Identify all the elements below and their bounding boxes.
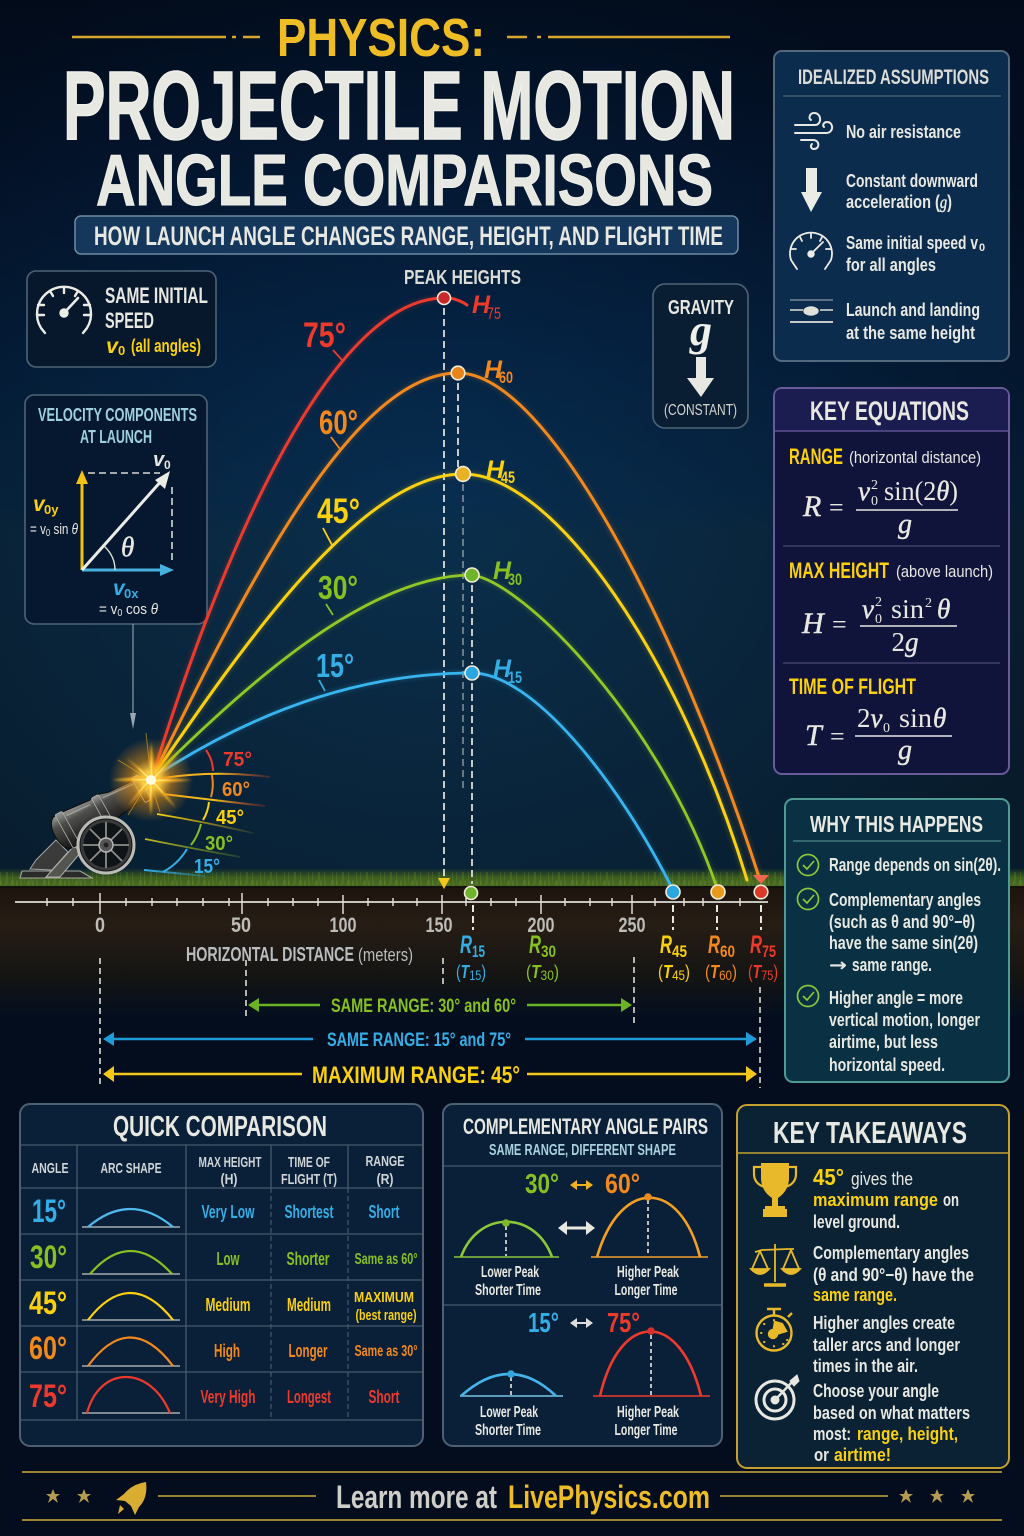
horizontal axis: 250 (618, 914, 646, 937)
panel: same initial speed: SAME INITIAL (105, 283, 208, 308)
row: 60 degrees: 60° (29, 1330, 67, 1366)
equation: time of flight: 0 (883, 721, 890, 736)
panel: key takeaways: Higher angles create (813, 1313, 955, 1333)
range labels: 45 (672, 967, 685, 983)
equation: range: 0 (871, 494, 878, 509)
panel: key takeaways: level ground. (813, 1212, 900, 1232)
panel: idealized assumptions: 0 (979, 242, 985, 254)
panel: idealized assumptions: for all angles (846, 255, 936, 275)
row: 75 degrees: 75° (29, 1378, 67, 1414)
range labels: (T (526, 962, 542, 982)
panel: idealized assumptions: at the same height (846, 323, 975, 343)
panel: idealized assumptions: acceleration (g) (846, 192, 952, 212)
range labels: 15 (472, 942, 485, 961)
panel: complementary angle pairs: SAME RANGE, DIFFERENT SHAPE (489, 1142, 676, 1159)
velocity vector diagram: v (33, 493, 46, 516)
velocity vector diagram: v (113, 577, 126, 600)
velocity vector diagram (30, 449, 174, 619)
arrow: maximum range 45 (103, 1062, 757, 1089)
horizontal axis: 50 (231, 914, 251, 937)
range labels: R (750, 931, 762, 959)
range labels: 75 (762, 942, 776, 961)
callout: gravity: g (689, 306, 712, 355)
icon: wind (795, 113, 832, 149)
range labels: (T (658, 962, 674, 982)
pair: 30 and 60: 30° (525, 1168, 559, 1199)
pair: 30 and 60: Higher Peak (617, 1264, 679, 1281)
panel: why this happens: airtime, but less (829, 1032, 938, 1052)
peak labels: H (493, 557, 512, 585)
panel: quick comparison: QUICK COMPARISON (113, 1111, 327, 1143)
pair: 30 and 60: Lower Peak (481, 1264, 539, 1281)
row: 75 degrees: Short (368, 1387, 400, 1407)
panel: why this happens (785, 799, 1009, 1082)
row: 15 degrees: 15° (32, 1193, 66, 1229)
horizontal axis: 150 (426, 914, 452, 937)
row: 60 degrees: Same as 30° (354, 1343, 418, 1360)
arrow: same range 30 and 60: SAME RANGE: 30° and 60° (331, 996, 516, 1017)
arc: 60 degrees (152, 373, 760, 880)
icon: target (756, 1375, 799, 1419)
arc glow (152, 298, 760, 888)
range labels: 15 (469, 967, 481, 983)
equation: max height: H (801, 607, 826, 640)
equation: max height: MAX HEIGHT (789, 558, 889, 583)
row: 45 degrees: Medium (206, 1295, 250, 1315)
velocity vector diagram: 0y (44, 502, 59, 517)
pair: 30 and 60: Shorter Time (475, 1282, 541, 1299)
row: 45 degrees: MAXIMUM (354, 1289, 414, 1306)
range labels: R (660, 931, 672, 959)
peak labels: 60 (499, 368, 513, 387)
peak markers (438, 292, 479, 680)
range labels: 60 (720, 942, 735, 961)
range labels: ) (773, 962, 778, 982)
panel: key takeaways: most: (813, 1424, 851, 1444)
horizontal axis: 100 (330, 914, 356, 937)
panel: key equations (774, 388, 1009, 774)
panel: why this happens: same range. (852, 955, 932, 975)
arrow: same range 15 and 75: SAME RANGE: 15° and 75° (327, 1030, 511, 1051)
table header: (H) (220, 1171, 238, 1188)
pair: 15 and 75: 15° (528, 1307, 559, 1338)
range labels: 30 (541, 967, 554, 983)
peak labels: 75 (487, 304, 501, 323)
velocity vector diagram: cos (122, 601, 151, 618)
subtitle banner (75, 216, 738, 254)
range labels (456, 931, 778, 983)
callout: gravity: (CONSTANT) (664, 402, 737, 419)
equation: time of flight (789, 674, 952, 766)
equation: range: 2 (871, 478, 878, 493)
equation: time of flight: g (898, 735, 912, 766)
angle labels on arcs: 30° (318, 569, 358, 606)
horizontal axis: (meters) (358, 945, 413, 965)
equation: max height: (above launch) (896, 562, 993, 581)
velocity vector diagram: θ (72, 521, 78, 538)
table header: ANGLE (32, 1160, 68, 1177)
footer (22, 1472, 1002, 1520)
illustration: cannon (20, 770, 154, 878)
range labels: R (529, 931, 541, 959)
pair: 30 and 60: 60° (605, 1168, 640, 1199)
equation: time of flight: sin (899, 703, 933, 733)
panel: key takeaways: on (943, 1190, 959, 1210)
subtitle banner: HOW LAUNCH ANGLE CHANGES RANGE, HEIGHT, AND FLIGHT TIME (94, 221, 723, 251)
velocity vector diagram: 0 (164, 458, 171, 472)
arrow: same range 30 and 60 (248, 996, 632, 1017)
arc: 15 degrees (152, 673, 672, 888)
velocity vector diagram: 0 (46, 528, 51, 539)
panel: key takeaways (737, 1105, 1009, 1468)
velocity vector diagram: 0 (117, 608, 123, 619)
panel: key takeaways: maximum range (813, 1190, 938, 1210)
horizontal axis: 200 (528, 914, 554, 937)
equation: max height: θ (937, 594, 950, 624)
row: 15 degrees: Short (368, 1202, 400, 1222)
icon: scales (751, 1244, 800, 1285)
row: 45 degrees (29, 1285, 416, 1324)
velocity vector diagram: sin (50, 521, 72, 538)
peak labels: H (486, 456, 505, 484)
equation: range: R (802, 490, 821, 523)
velocity vector diagram: θ (151, 601, 158, 618)
panel: idealized assumptions (774, 51, 1009, 361)
callout: gravity (653, 284, 748, 428)
panel: key takeaways: 45° (813, 1164, 844, 1190)
icon: down arrow (801, 168, 822, 212)
panel: key takeaways: Choose your angle (813, 1381, 939, 1401)
panel: same initial speed: SPEED (105, 308, 154, 333)
equation: max height: sin (891, 594, 925, 624)
row: 45 degrees: (best range) (356, 1307, 416, 1324)
launch angle guide (144, 749, 270, 878)
range labels: ) (554, 962, 559, 982)
angle labels on arcs: 60° (319, 404, 358, 442)
check marks (798, 854, 818, 1006)
equation: range: = (829, 493, 844, 522)
panel: complementary angle pairs (443, 1104, 722, 1446)
footer: LivePhysics.com (508, 1479, 710, 1515)
panel: idealized assumptions: No air resistance (846, 122, 961, 142)
table header: MAX HEIGHT (198, 1154, 262, 1171)
row: 75 degrees (29, 1377, 400, 1414)
equation: range: (horizontal distance) (849, 448, 981, 467)
main title line 2: ANGLE COMPARISONS (96, 141, 713, 221)
equation: range: v (858, 476, 870, 506)
panel: same initial speed: v (106, 335, 119, 358)
row: 30 degrees: 30° (30, 1239, 67, 1275)
panel: why this happens: Higher angle = more (829, 988, 963, 1008)
panel: key takeaways: same range. (813, 1285, 897, 1305)
velocity vector diagram: v (153, 449, 166, 471)
title block (63, 8, 738, 254)
row: 30 degrees: Same as 60° (354, 1251, 418, 1268)
pair: 15 and 75: Lower Peak (480, 1404, 538, 1421)
carriage (20, 840, 92, 878)
equation: time of flight: = (830, 722, 845, 751)
equation: range: sin(2θ) (884, 476, 958, 506)
panel: why this happens: → (829, 955, 847, 976)
horizontal axis: 0 (95, 914, 105, 937)
panel: velocity components: VELOCITY COMPONENTS (38, 405, 197, 425)
panel: why this happens: vertical motion, longer (829, 1010, 980, 1030)
footer: Learn more at (336, 1479, 497, 1515)
panel: same initial speed: (all angles) (131, 336, 201, 356)
equation: max height: v (862, 594, 874, 624)
peak labels: PEAK HEIGHTS (404, 267, 521, 289)
icons: stars (46, 1489, 975, 1503)
range labels: 60 (719, 967, 732, 983)
panel: key takeaways: (θ and 90°−θ) have the (813, 1265, 974, 1285)
row: 60 degrees: High (214, 1341, 240, 1361)
arc: 45 degrees (152, 474, 747, 880)
panel: quick comparison (20, 1104, 423, 1446)
range labels: R (708, 931, 720, 959)
pair: 15 and 75 (460, 1307, 710, 1439)
pair: 15 and 75: Higher Peak (617, 1404, 679, 1421)
callout: gravity: GRAVITY (668, 297, 734, 319)
row: 15 degrees (32, 1193, 400, 1229)
range labels: (T (456, 962, 472, 982)
panel: why this happens: horizontal speed. (829, 1055, 945, 1075)
equation: max height: 0 (875, 612, 882, 627)
range labels: ) (481, 962, 486, 982)
panel: complementary angle pairs: COMPLEMENTARY ANGLE PAIRS (463, 1114, 708, 1139)
panel: idealized assumptions: Same initial speed v (846, 233, 978, 253)
row: 15 degrees: Shortest (284, 1202, 334, 1222)
row: 15 degrees: Very Low (202, 1202, 255, 1222)
panel: idealized assumptions: Constant downward (846, 171, 978, 191)
launch angle guide: 45° (216, 807, 244, 829)
equation: time of flight: T (805, 719, 824, 752)
trajectory chart (152, 267, 760, 888)
row: 60 degrees (29, 1330, 418, 1366)
row: 30 degrees: Shorter (286, 1249, 330, 1269)
equation: time of flight: TIME OF FLIGHT (789, 674, 916, 699)
velocity vector diagram: = v (30, 521, 50, 538)
pair: 15 and 75: Longer Time (614, 1422, 678, 1439)
launch angle guide: 75° (223, 749, 252, 771)
equation: range: g (898, 509, 912, 540)
pair: 30 and 60 (454, 1168, 708, 1299)
horizontal axis: HORIZONTAL DISTANCE (186, 944, 354, 966)
icon: rocket (116, 1482, 146, 1515)
panel: key takeaways: range, height, (857, 1424, 958, 1444)
equation: max height: 2 (925, 596, 932, 611)
landing markers (438, 875, 769, 930)
velocity vector diagram: = v (99, 601, 119, 618)
launch angle guide: 60° (222, 779, 250, 801)
peak height guide lines (444, 308, 472, 884)
range labels: 45 (672, 942, 687, 961)
angle labels on arcs: 15° (316, 647, 354, 684)
illustration: muzzle flash (109, 733, 193, 822)
row: 75 degrees: Very High (200, 1387, 256, 1407)
icon: trophy (754, 1163, 796, 1217)
table header: RANGE (366, 1153, 404, 1170)
panel: key takeaways: or (814, 1445, 829, 1465)
row: 30 degrees (30, 1239, 418, 1275)
panel: key takeaways: times in the air. (813, 1356, 918, 1376)
range labels: 75 (761, 967, 773, 983)
icon: stopwatch (756, 1309, 792, 1350)
row: 45 degrees: Medium (287, 1295, 331, 1315)
row: 45 degrees: 45° (29, 1285, 67, 1321)
panel: key takeaways: based on what matters (813, 1403, 970, 1423)
kicker: physics: PHYSICS: (277, 8, 485, 68)
panel: key takeaways: airtime! (834, 1445, 891, 1465)
peak labels: 45 (501, 468, 515, 487)
range labels: (T (748, 962, 764, 982)
equation: time of flight: 2v (857, 703, 882, 733)
equation: max height: 2 (875, 595, 882, 610)
panel: why this happens: Complementary angles (829, 890, 981, 910)
panel: velocity components (25, 395, 207, 624)
peak labels: H (484, 356, 503, 384)
table header (32, 1153, 404, 1188)
icon: speedometer (37, 287, 91, 333)
peak labels (404, 267, 522, 687)
row: 60 degrees: Longer (288, 1341, 328, 1361)
equation: range: RANGE (789, 444, 843, 469)
arrow: same range 15 and 75 (103, 1030, 757, 1051)
equation: max height: 2g (892, 627, 918, 657)
range labels: ) (732, 962, 737, 982)
icon: level launch (790, 300, 833, 322)
equation: time of flight: θ (933, 703, 946, 733)
range labels: 30 (541, 942, 556, 961)
angle labels on arcs (303, 316, 360, 691)
angle labels on arcs: 75° (303, 316, 346, 355)
arc: 75 degrees (152, 298, 467, 778)
equation: range (789, 444, 981, 540)
velocity vector diagram: θ (121, 532, 134, 562)
panel: idealized assumptions: Launch and landing (846, 300, 980, 320)
arc: 30 degrees (152, 575, 717, 888)
row: 30 degrees: Low (216, 1249, 240, 1269)
peak labels: 30 (508, 570, 522, 589)
panel: key takeaways: gives the (851, 1169, 913, 1189)
icon: gauge (790, 233, 832, 269)
panel: why this happens: (such as θ and 90°−θ) (829, 912, 975, 932)
row: 75 degrees: Longest (287, 1387, 331, 1407)
pair: 30 and 60: Longer Time (614, 1282, 678, 1299)
range labels: ) (685, 962, 690, 982)
panel: why this happens: have the same sin(2θ) (829, 933, 978, 953)
arrow: maximum range 45: MAXIMUM RANGE: 45° (312, 1062, 520, 1089)
equation: max height (789, 558, 993, 657)
range labels: (T (705, 962, 721, 982)
launch angle guide: 30° (205, 833, 233, 855)
launch angle guide: 15° (194, 856, 220, 878)
peak labels: 15 (508, 668, 522, 687)
wheel (78, 817, 134, 873)
horizontal axis (15, 893, 768, 966)
panel: same initial speed: 0 (118, 343, 125, 358)
range dimension arrows (100, 957, 760, 1089)
pair: 15 and 75: 75° (607, 1307, 640, 1338)
barrel (46, 770, 154, 853)
peak labels: H (472, 291, 491, 319)
equation: max height: = (832, 610, 847, 639)
panel: same initial speed (27, 271, 216, 367)
table header: TIME OF (288, 1154, 330, 1171)
panel: key takeaways: taller arcs and longer (813, 1335, 960, 1355)
angle labels on arcs: 45° (317, 492, 360, 531)
range labels: R (460, 931, 472, 959)
pair: 15 and 75: Shorter Time (475, 1422, 541, 1439)
arrow: velocity box to cannon (130, 624, 136, 729)
velocity vector diagram: 0x (124, 586, 139, 601)
panel: key takeaways: Complementary angles (813, 1243, 969, 1263)
panel: velocity components: AT LAUNCH (80, 427, 152, 447)
table header: (R) (376, 1171, 394, 1188)
table header: FLIGHT (T) (281, 1171, 337, 1188)
table header: ARC SHAPE (100, 1160, 162, 1177)
peak labels: H (493, 655, 512, 683)
